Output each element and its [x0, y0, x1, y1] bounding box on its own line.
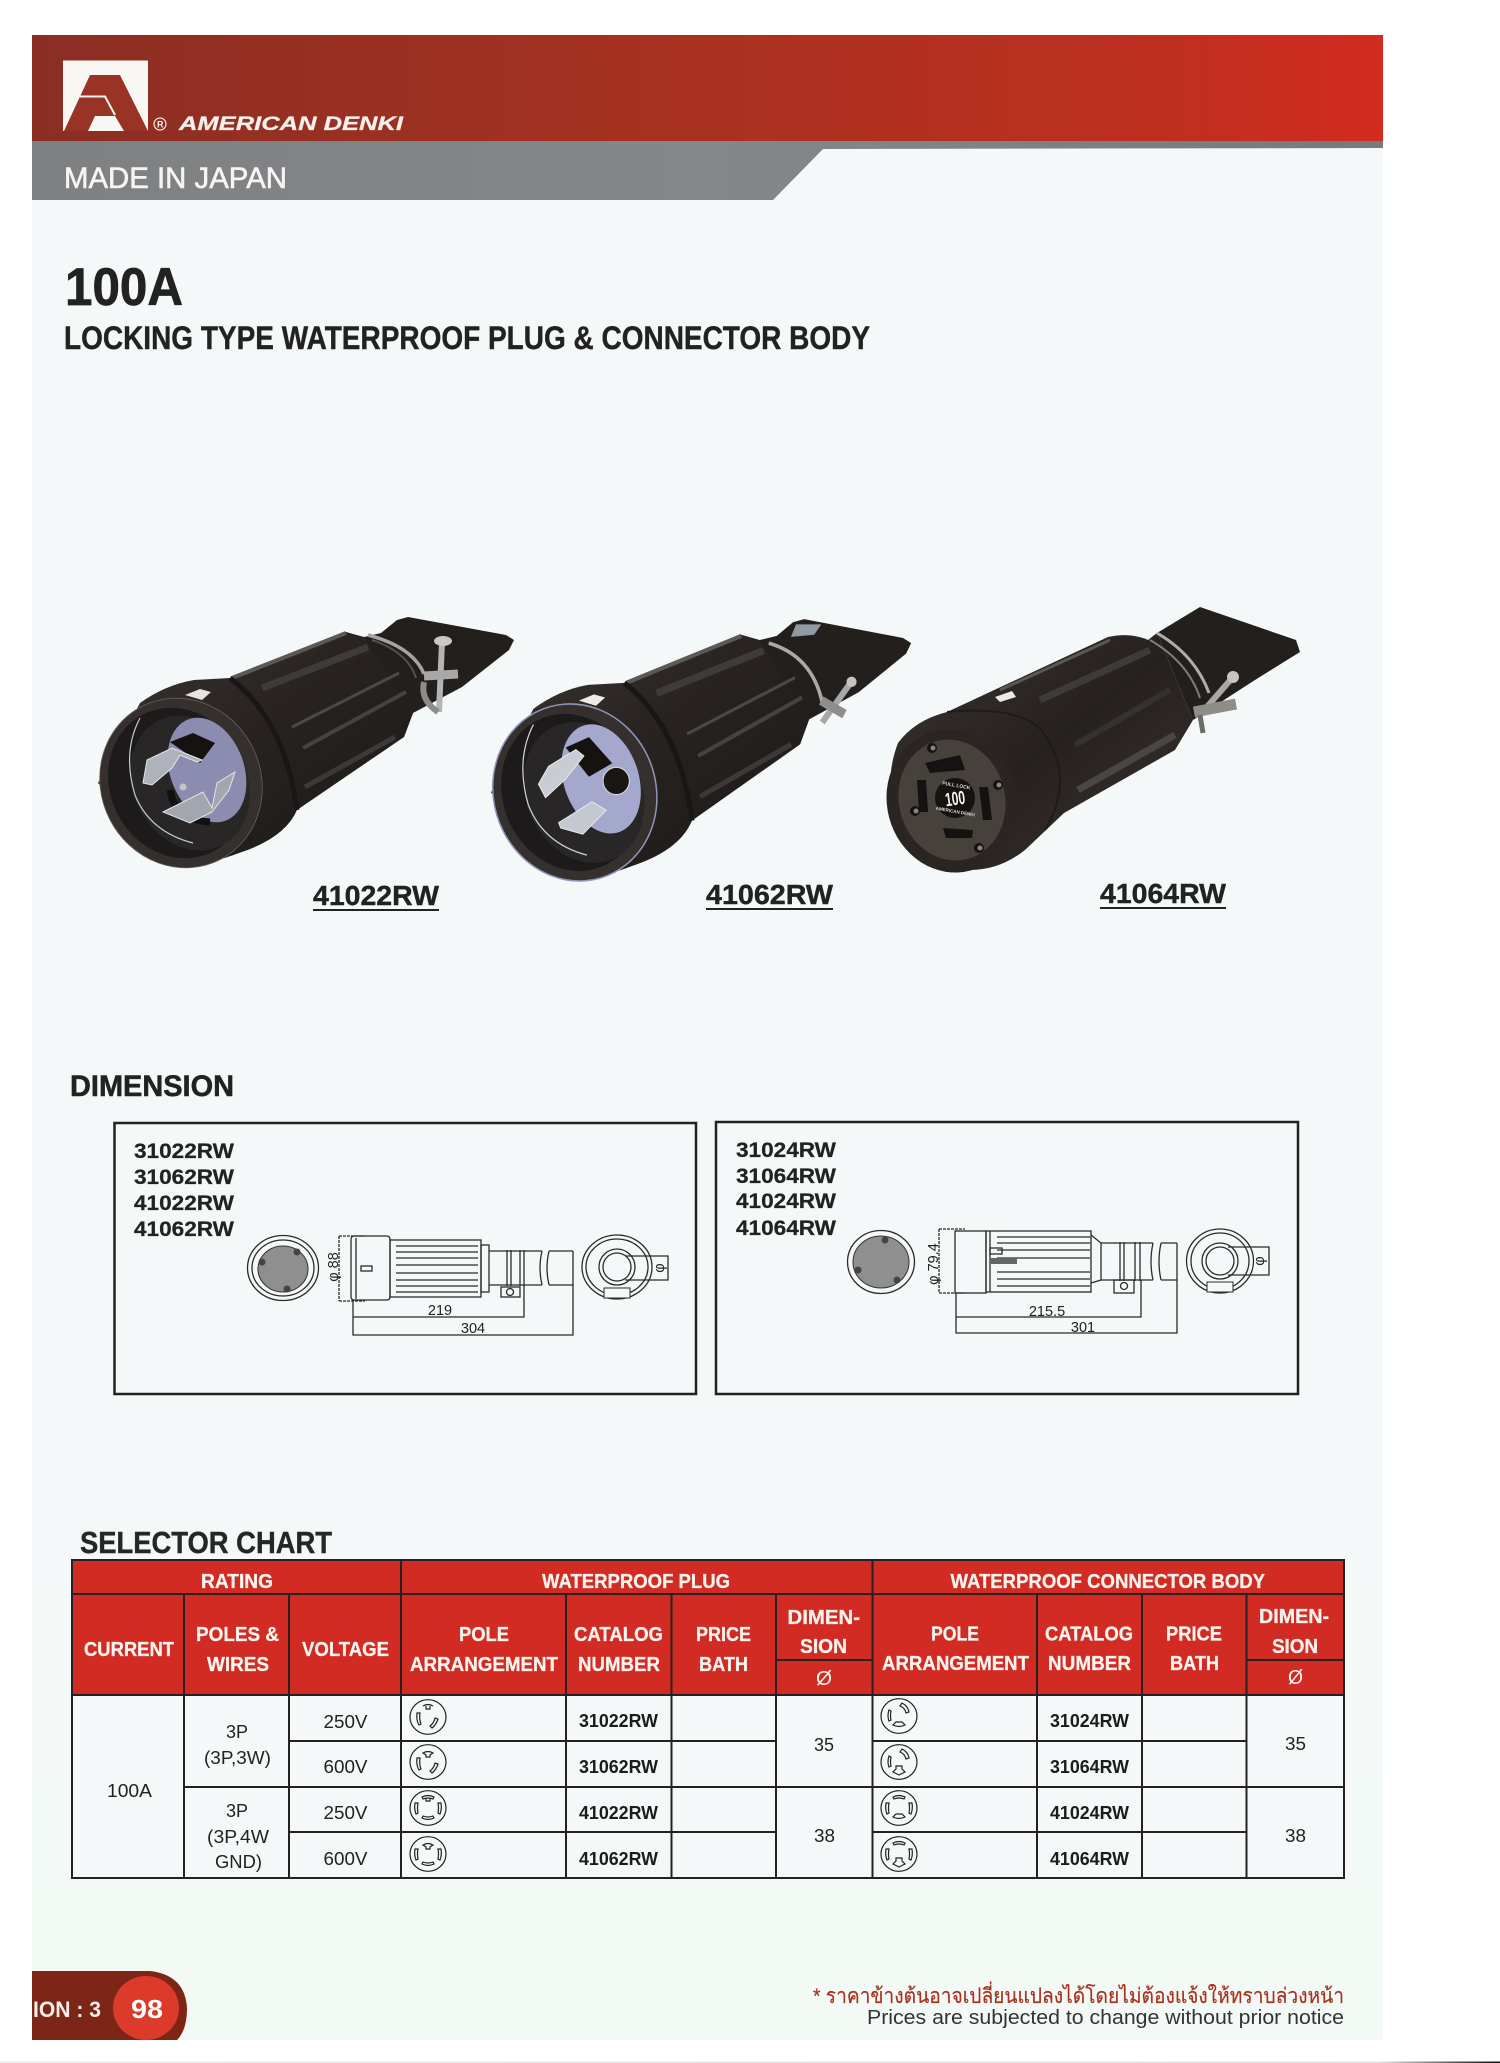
icon: pole arrangement 41064RW [881, 1837, 917, 1871]
model list: 31024RW [736, 1138, 837, 1162]
title: 100A [65, 258, 183, 317]
registered mark: R [157, 120, 164, 130]
connector dimensions: 35 [1285, 1733, 1306, 1754]
connector catalog numbers: 31064RW [1050, 1756, 1130, 1777]
plug catalog numbers [579, 1710, 659, 1869]
dimension lines: 219 [428, 1303, 452, 1319]
model list: 31022RW [134, 1139, 235, 1163]
header labels: CATALOG [574, 1624, 663, 1646]
header labels: VOLTAGE [302, 1639, 389, 1661]
icon: pole arrangement 31024RW [881, 1699, 917, 1733]
model label 41064RW: 41064RW [1100, 878, 1227, 909]
table grid [72, 1560, 1344, 1878]
table header fill [72, 1560, 1344, 1695]
rating values: 3P [226, 1800, 248, 1821]
rating values [107, 1711, 368, 1872]
icon: pole arrangement 41062RW [410, 1837, 446, 1871]
selector chart table [72, 1560, 1344, 1878]
price notice english: Prices are subjected to change without prior notice [867, 2007, 1344, 2029]
rating values: (3P,3W) [204, 1747, 271, 1768]
connector catalog numbers: 41064RW [1050, 1848, 1130, 1869]
rating values: 3P [226, 1721, 248, 1742]
connector dimensions: 38 [1285, 1825, 1306, 1846]
grey band [32, 141, 1383, 200]
header labels: Ø [816, 1668, 832, 1690]
header labels: Ø [1288, 1667, 1303, 1689]
header labels: BATH [1170, 1653, 1219, 1675]
header labels: WIRES [207, 1654, 269, 1676]
product photo: connector body 41064RW [871, 607, 1300, 887]
model list: 31062RW [134, 1165, 235, 1189]
face badge: 100 [944, 788, 967, 811]
plug catalog numbers: 31022RW [579, 1710, 659, 1731]
connector catalog numbers: 41024RW [1050, 1802, 1130, 1823]
made in japan: MADE IN JAPAN [64, 162, 287, 195]
model list: 41062RW [134, 1217, 235, 1241]
connector catalog numbers [1050, 1710, 1130, 1869]
front view [248, 1236, 318, 1300]
header labels: RATING [201, 1571, 273, 1593]
header labels: NUMBER [1048, 1653, 1132, 1675]
model list [736, 1138, 837, 1240]
rear view: φ [652, 1263, 668, 1273]
rating values: 600V [324, 1848, 368, 1869]
dimension lines: φ 79.4 [926, 1243, 942, 1285]
red band [32, 35, 1383, 141]
header labels: WATERPROOF CONNECTOR BODY [950, 1571, 1266, 1593]
connector dimensions [1285, 1733, 1306, 1846]
icon: pole arrangement 41022RW [410, 1791, 446, 1825]
plug dimensions [814, 1734, 835, 1846]
product photo: plug 41022RW [71, 617, 514, 896]
dimension lines: φ 88 [326, 1252, 342, 1282]
header labels: NUMBER [578, 1654, 661, 1676]
header labels: ARRANGEMENT [410, 1654, 558, 1676]
plug dimensions: 35 [814, 1734, 834, 1755]
header labels: PRICE [1166, 1624, 1222, 1646]
dimension lines: 215.5 [1029, 1304, 1065, 1320]
panel: dimension connector body [716, 1122, 1298, 1394]
dimension heading: DIMENSION [70, 1070, 234, 1103]
model list: 41064RW [736, 1216, 837, 1240]
model label 41022RW: 41022RW [313, 880, 440, 911]
logo [63, 60, 148, 131]
header labels: POLE [459, 1624, 509, 1646]
plug catalog numbers: 41062RW [579, 1848, 659, 1869]
header labels: PRICE [696, 1624, 751, 1646]
registered mark [154, 118, 166, 130]
face badge [935, 778, 975, 818]
header labels: WATERPROOF PLUG [542, 1571, 730, 1593]
icon: pole arrangement 31062RW [410, 1745, 446, 1779]
price notice thai: * ราคาข้างต้นอาจเปลี่ยนแปลงได้โดยไม่ต้องแจ้งให้ทราบล่วงหน้า [813, 1981, 1344, 2008]
selector chart heading: SELECTOR CHART [80, 1525, 332, 1560]
model list: 31064RW [736, 1164, 837, 1188]
header labels: DIMEN- [1259, 1606, 1329, 1628]
rear view: φ [1252, 1256, 1268, 1266]
rating values: 600V [324, 1756, 368, 1777]
model label 41062RW: 41062RW [706, 879, 834, 910]
table body fill [72, 1695, 1344, 1878]
header labels: DIMEN- [788, 1607, 860, 1629]
plug dimensions: 38 [814, 1825, 835, 1846]
side view [939, 1229, 1177, 1293]
face badge: PULL LOCK [942, 781, 971, 792]
rating values: GND) [215, 1851, 262, 1872]
header labels: CATALOG [1045, 1624, 1133, 1646]
rear view [582, 1235, 668, 1299]
subtitle: LOCKING TYPE WATERPROOF PLUG & CONNECTOR BODY [64, 320, 870, 356]
dimension lines: 301 [1071, 1320, 1095, 1336]
dimension lines [326, 1252, 573, 1337]
header labels: CURRENT [84, 1639, 174, 1661]
rating values: 100A [107, 1780, 153, 1801]
header labels: POLE [931, 1624, 979, 1646]
header labels: POLES & [196, 1624, 279, 1646]
icon: pole arrangement 41024RW [881, 1791, 917, 1825]
page number badge [113, 1976, 179, 2040]
section label: ION : 3 [33, 1997, 101, 2022]
header banner [32, 35, 1383, 200]
rating values: 250V [324, 1711, 368, 1732]
footer page tab [32, 1971, 187, 2040]
model list: 41024RW [736, 1189, 837, 1213]
model list: 41022RW [134, 1191, 235, 1215]
dimension lines: 304 [461, 1321, 485, 1337]
plug catalog numbers: 41022RW [579, 1802, 659, 1823]
icon: pole arrangement 31064RW [881, 1745, 917, 1779]
connector catalog numbers: 31024RW [1050, 1710, 1130, 1731]
bottom scan shadow [0, 2062, 1500, 2063]
front view [848, 1230, 914, 1294]
rear view [1186, 1229, 1269, 1293]
rating values: (3P,4W [207, 1826, 270, 1847]
face badge: AMERICAN DENKI [935, 806, 975, 817]
header labels: SION [800, 1636, 847, 1658]
model list [134, 1139, 235, 1241]
product photo: plug 41062RW [463, 619, 911, 910]
dimension lines [926, 1243, 1177, 1336]
icon: pole arrangement 31022RW [410, 1700, 446, 1734]
header labels: ARRANGEMENT [882, 1653, 1029, 1675]
side view [339, 1236, 573, 1301]
header labels: BATH [699, 1654, 748, 1676]
plug catalog numbers: 31062RW [579, 1756, 659, 1777]
brand name: AMERICAN DENKI [178, 113, 404, 135]
header labels: SION [1272, 1636, 1318, 1658]
rating values: 250V [324, 1802, 368, 1823]
header labels [84, 1571, 1329, 1690]
page number badge: 98 [131, 1994, 163, 2024]
panel: dimension plug [114, 1123, 696, 1394]
